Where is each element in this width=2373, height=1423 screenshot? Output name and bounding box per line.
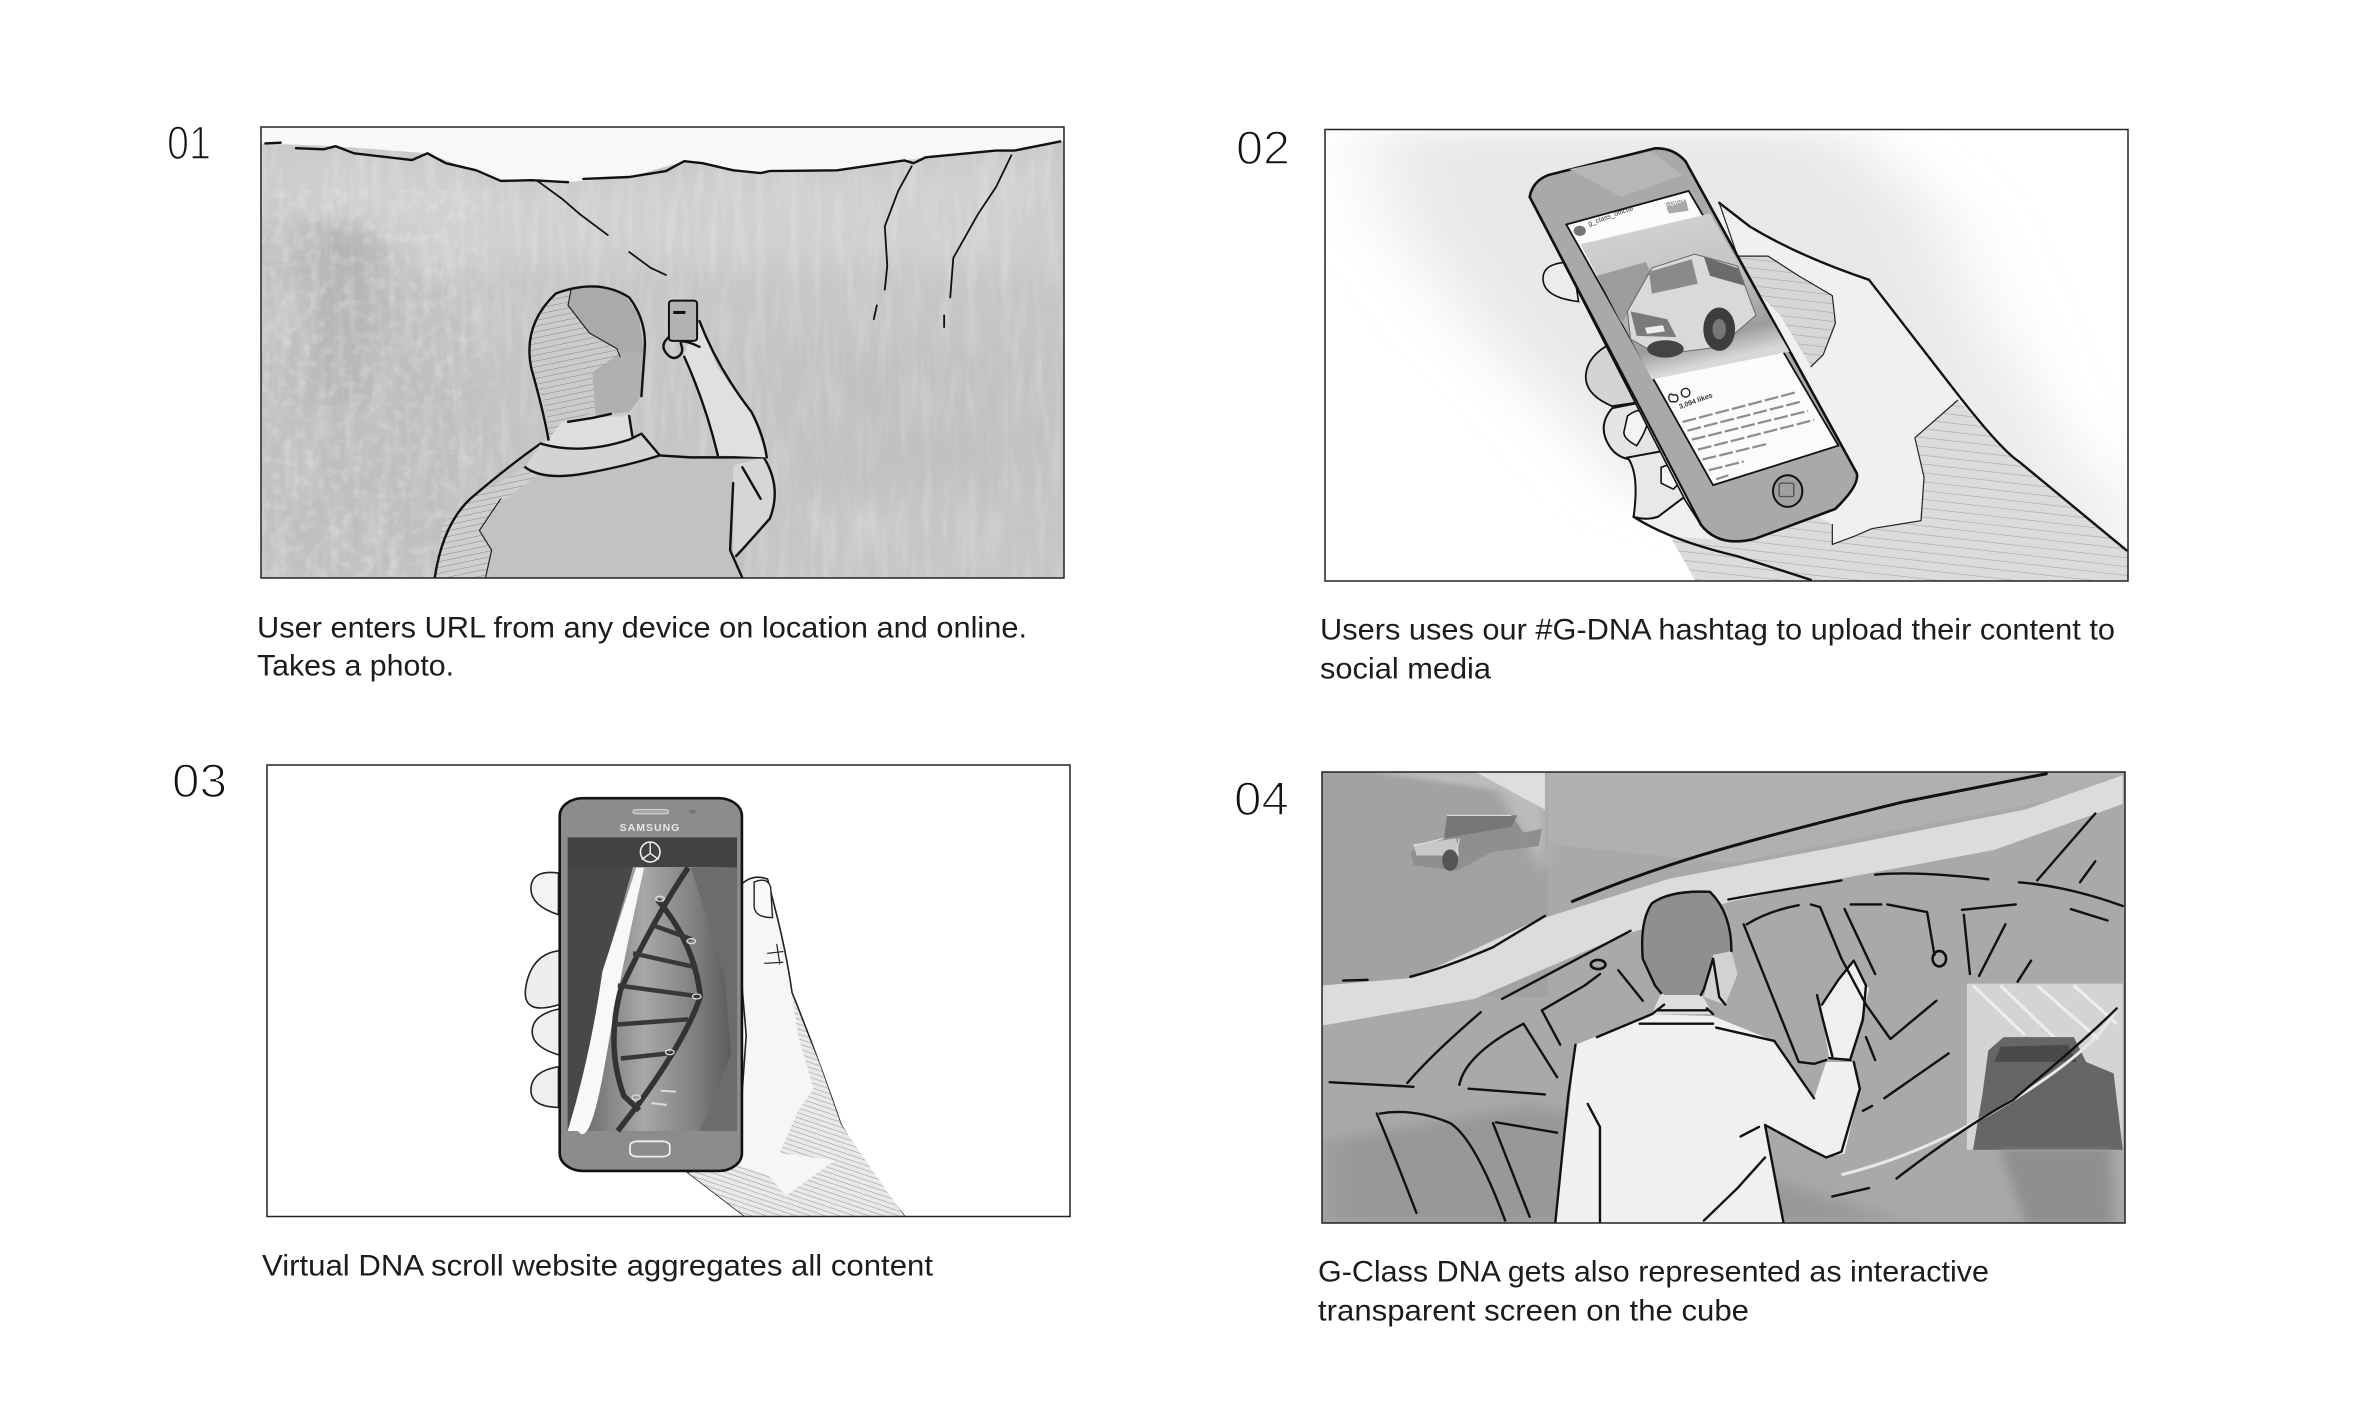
storyboard frame 01 bbox=[260, 127, 1064, 580]
caption 01: Takes a photo. bbox=[257, 650, 454, 682]
panel 03: virtual DNA scroll website on a phone bbox=[172, 754, 1070, 1282]
phone body bbox=[1530, 148, 1857, 541]
dna outline strokes bbox=[1330, 774, 2123, 1221]
step number 01: 01 bbox=[167, 116, 211, 169]
caption 04: transparent screen on the cube bbox=[1318, 1294, 1749, 1328]
man: raised arm and phone bbox=[663, 301, 767, 457]
caption 02: Users uses our #G-DNA hashtag to upload their content to bbox=[1320, 614, 2115, 646]
caption 02 bbox=[1320, 614, 2115, 686]
hand holding the phone bbox=[1543, 203, 2129, 584]
samsung phone body bbox=[560, 798, 742, 1171]
storyboard frame 02: 3,094 likes bbox=[1678, 392, 1714, 411]
step number 03: 03 bbox=[172, 754, 227, 807]
caption 02: social media bbox=[1320, 652, 1491, 686]
caption 01 bbox=[257, 612, 1027, 682]
caption 01: User enters URL from any device on location and online. bbox=[257, 612, 1027, 644]
storyboard frame 03 bbox=[524, 796, 906, 1216]
mercedes star logo bbox=[640, 842, 660, 862]
mountain skyline and ridge lines bbox=[265, 141, 1060, 327]
man: collar and neck bbox=[525, 412, 660, 476]
panel 01: user photographing the valley bbox=[167, 116, 1064, 682]
storyboard frame 02: g_class_official bbox=[1587, 205, 1635, 228]
man: head and hair bbox=[529, 285, 645, 440]
samsung wordmark: SAMSUNG bbox=[620, 822, 680, 834]
man from behind in white jacket bbox=[1554, 892, 1869, 1224]
caption 03: Virtual DNA scroll website aggregates all content bbox=[262, 1250, 934, 1282]
light diagonal band of the dna strand bbox=[1322, 775, 2123, 1026]
storyboard frame 04 bbox=[1322, 771, 2125, 1224]
man: shirt bbox=[434, 434, 776, 580]
phone screen with dna helix bbox=[568, 837, 737, 1134]
panel 02: uploading with the hashtag bbox=[1236, 121, 2129, 686]
step number 04: 04 bbox=[1234, 772, 1289, 825]
caption 04 bbox=[1318, 1256, 1989, 1328]
caption 04: G-Class DNA gets also represented as interactive bbox=[1318, 1256, 1989, 1288]
hand holding the samsung phone bbox=[525, 872, 905, 1217]
step number 02: 02 bbox=[1236, 121, 1290, 174]
storyboard frame 02: Follow bbox=[1664, 193, 1689, 210]
storyboard frame 02 bbox=[1325, 130, 2129, 584]
panel 04: interactive transparent screen on the cube bbox=[1234, 771, 2125, 1328]
right truck photo bbox=[1842, 984, 2123, 1222]
top-left car photo bbox=[1410, 815, 1542, 871]
phone screen with post and car photo bbox=[1566, 191, 1838, 485]
